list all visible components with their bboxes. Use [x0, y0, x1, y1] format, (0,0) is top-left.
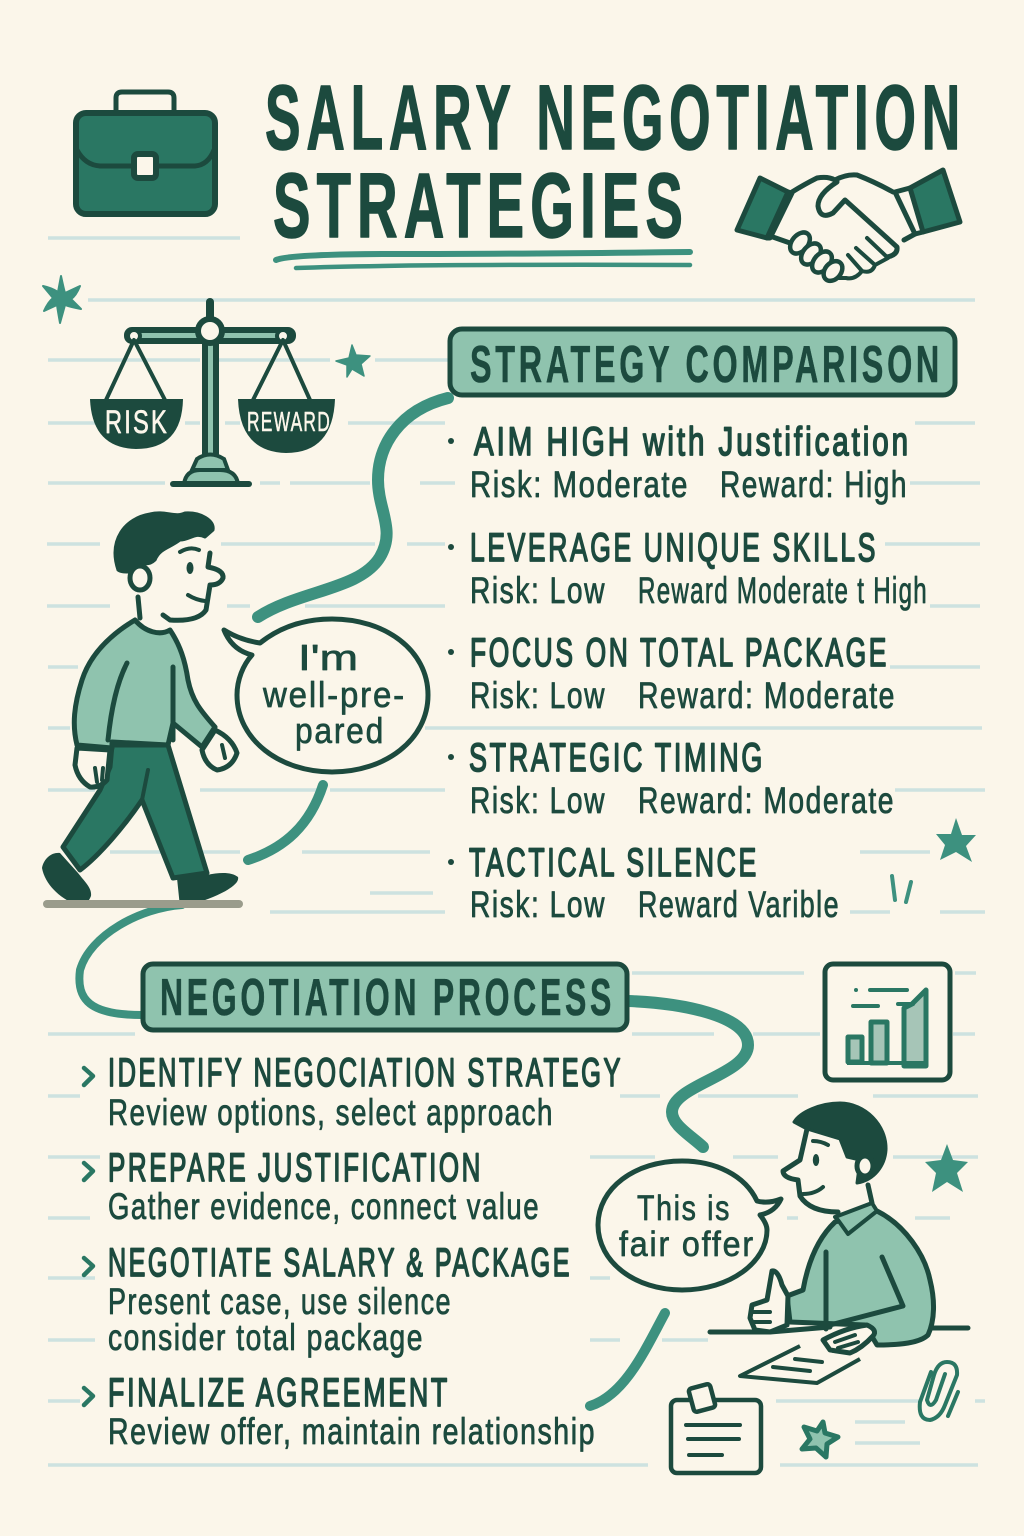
- icon: large star: [925, 1144, 968, 1192]
- step: identify strategy: Review options, select approach: [108, 1092, 554, 1133]
- item: strategic timing: STRATEGIC TIMING: [469, 736, 765, 780]
- panel: negotiation process: [84, 964, 627, 1452]
- item: strategic timing: [448, 736, 895, 821]
- icon: clipped note: [671, 1384, 761, 1473]
- icon: paperclip: [920, 1362, 958, 1420]
- item: tactical silence: Risk: Low: [470, 884, 606, 925]
- speech bubble: well prepared: well-pre-: [262, 674, 406, 715]
- step: negotiate salary: [84, 1241, 572, 1358]
- arrow: ribbon to process heading: [79, 905, 182, 1015]
- item: tactical silence: Reward Varible: [638, 884, 840, 925]
- item: total package: Risk: Low: [470, 675, 606, 716]
- speech bubble: fair offer: fair offer: [619, 1225, 755, 1264]
- step: negotiate salary: NEGOTIATE SALARY & PACKAGE: [108, 1241, 572, 1285]
- speech bubble: well prepared: I'm: [298, 637, 358, 678]
- item: tactical silence: TACTICAL SILENCE: [469, 841, 759, 885]
- title: [265, 67, 966, 257]
- arrow: ribbon from bubble down: [248, 785, 323, 860]
- step: identify strategy: [84, 1051, 623, 1133]
- icon: outlined star: [802, 1422, 838, 1457]
- item: strategic timing: Reward: Moderate: [638, 780, 895, 821]
- step: identify strategy: IDENTIFY NEGOCIATION STRATEGY: [108, 1051, 623, 1095]
- icon: bar chart board: [825, 964, 950, 1080]
- icon: balance scale: REWARD: [247, 406, 331, 437]
- icon: document on desk: [740, 1346, 860, 1383]
- step: prepare justification: Gather evidence, connect value: [108, 1186, 540, 1227]
- icon: balance scale: RISK: [105, 404, 169, 440]
- item: aim high: [448, 420, 911, 505]
- heading: negotiation process: NEGOTIATION PROCESS: [160, 969, 615, 1027]
- icon: small star: [336, 345, 370, 377]
- icon: star right: [936, 818, 976, 862]
- icon: briefcase: [76, 92, 215, 214]
- item: aim high: Risk: Moderate: [470, 464, 689, 505]
- item: leverage skills: Risk: Low: [470, 570, 606, 611]
- item: leverage skills: [448, 526, 928, 611]
- heading: negotiation process: [143, 964, 627, 1030]
- step: finalize agreement: Review offer, maintain relationship: [108, 1411, 596, 1452]
- arrow: ribbon to finalize step: [590, 1313, 665, 1406]
- step: negotiate salary: consider total package: [108, 1317, 424, 1358]
- item: aim high: Reward: High: [720, 464, 908, 505]
- title underline: [276, 252, 690, 268]
- arrow: ribbon from strategy heading to walking man: [258, 398, 448, 617]
- item: total package: [448, 631, 896, 716]
- icon: asterisk star: [43, 276, 81, 323]
- speech bubble: fair offer: This is: [637, 1189, 731, 1228]
- icon: spark ticks: [892, 876, 911, 902]
- item: total package: Reward: Moderate: [638, 675, 896, 716]
- step: prepare justification: [84, 1146, 540, 1227]
- speech bubble: well prepared: [224, 619, 428, 772]
- icon: handshake: [737, 170, 960, 285]
- item: strategic timing: Risk: Low: [470, 780, 606, 821]
- icon: balance scale: [90, 302, 335, 484]
- walking man: [42, 513, 238, 907]
- title: STRATEGIES: [273, 155, 689, 257]
- step: prepare justification: PREPARE JUSTIFICATION: [108, 1146, 483, 1190]
- arrow: ribbon from process heading to bubble: [628, 1001, 748, 1147]
- step: finalize agreement: FINALIZE AGREEMENT: [108, 1371, 450, 1415]
- speech bubble: well prepared: pared: [295, 710, 385, 751]
- step: finalize agreement: [84, 1371, 596, 1452]
- speech bubble: fair offer: [598, 1161, 781, 1290]
- ground shadow: [43, 900, 243, 908]
- step: negotiate salary: Present case, use silence: [108, 1281, 452, 1322]
- panel: strategy comparison: [448, 329, 955, 925]
- item: tactical silence: [448, 841, 840, 925]
- seated man: [710, 1103, 968, 1353]
